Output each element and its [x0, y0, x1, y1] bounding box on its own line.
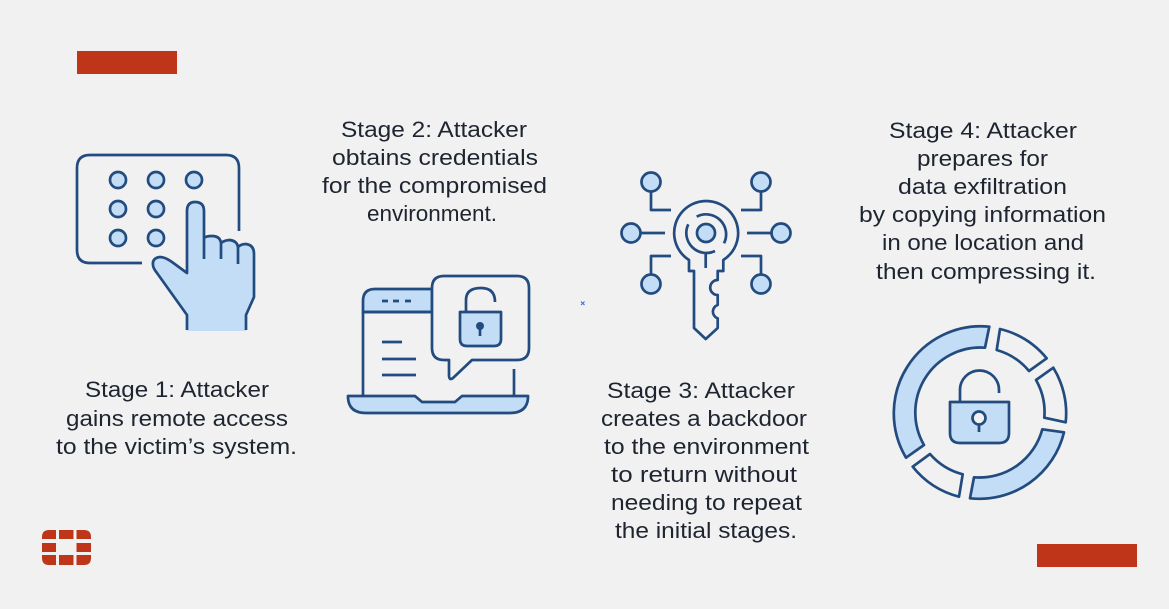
text: stage 3: to return without — [611, 462, 798, 487]
text: stage 2: Stage 2: Attacker — [341, 117, 528, 142]
text: stage 3: needing to repeat — [611, 490, 803, 515]
top red accent bar — [77, 51, 177, 74]
icon: segmented ring with open padlock — [894, 326, 1066, 499]
text: stage 1: Stage 1: Attacker — [85, 377, 270, 402]
text: stage 4: in one location and — [882, 230, 1084, 255]
text: stage 1 — [56, 377, 297, 459]
text: stage 3: creates a backdoor — [601, 406, 808, 431]
text: stage 3: to the environment — [604, 434, 810, 459]
text: stage 4: Stage 4: Attacker — [889, 118, 1078, 143]
text: stage 2 — [322, 117, 547, 226]
text: stage 4: data exfiltration — [898, 174, 1067, 199]
icon: hand pressing keypad — [77, 155, 254, 331]
text: stage 3: Stage 3: Attacker — [607, 378, 796, 403]
text: stage 1: to the victim’s system. — [56, 434, 297, 459]
text: stage 4 — [859, 118, 1106, 284]
text: stage 1: gains remote access — [66, 406, 288, 431]
text: stage 3 — [601, 378, 810, 543]
text: stage 2: for the compromised — [322, 173, 547, 198]
icon: laptop with unlocked speech bubble — [348, 276, 529, 413]
icon: key with network nodes — [622, 172, 790, 339]
text: stage 4: by copying information — [859, 202, 1106, 227]
bottom red accent bar — [1037, 544, 1137, 567]
text: stage 3: the initial stages. — [615, 518, 797, 543]
text: stage 4: then compressing it. — [876, 259, 1096, 284]
icon: Fortinet logo — [42, 530, 91, 565]
small blue cross mark — [581, 302, 584, 305]
text: stage 2: environment. — [367, 201, 497, 226]
text: stage 4: prepares for — [917, 146, 1049, 171]
text: stage 2: obtains credentials — [332, 145, 538, 170]
